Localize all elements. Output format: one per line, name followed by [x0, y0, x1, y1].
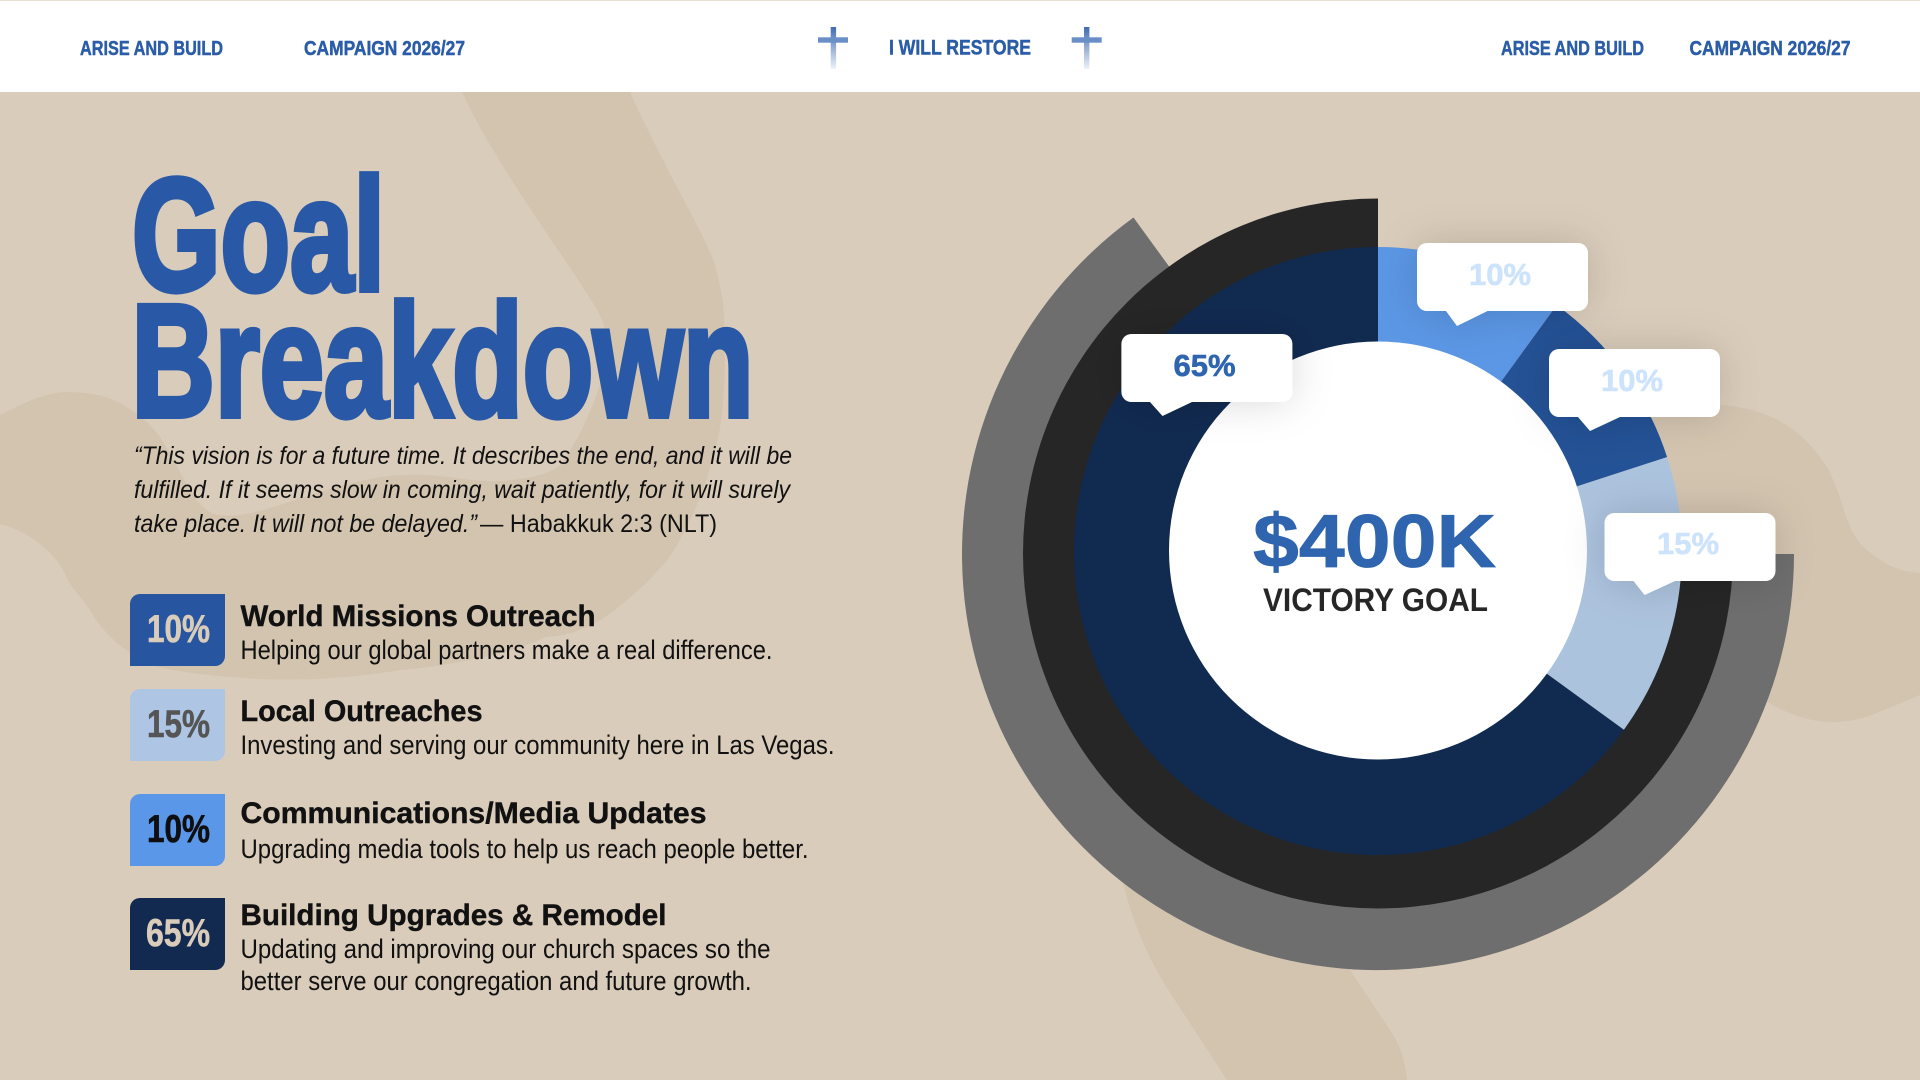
item heading: World Missions Outreach [240, 600, 596, 633]
title [132, 145, 754, 450]
header text: left arise and build: ARISE AND BUILD [80, 37, 223, 60]
item description: Upgrading media tools to help us reach people better. [240, 834, 808, 864]
callout: 10 percent top [1417, 243, 1588, 326]
callout: 65 percent [1121, 334, 1292, 416]
header text: right campaign: CAMPAIGN 2026/27 [1690, 37, 1850, 60]
quote text: “This vision is for a future time. It describes the end, and it will be [134, 442, 792, 470]
segment 10 percent missions [1378, 305, 1667, 551]
header text: i will restore: I WILL RESTORE [889, 36, 1031, 60]
quote text [134, 442, 792, 538]
callout: 10 percent right [1549, 349, 1720, 431]
item heading: Local Outreaches [240, 695, 482, 728]
background swoosh: left [0, 92, 725, 680]
item description: better serve our congregation and future growth. [240, 966, 752, 996]
item description: Helping our global partners make a real difference. [240, 635, 772, 665]
header bar [0, 0, 1920, 92]
legend: local outreaches [130, 689, 834, 761]
legend: communications and media updates [130, 794, 808, 866]
outer gray ring [962, 218, 1794, 970]
center amount: $400K [1253, 499, 1496, 583]
callout: 15 percent [1604, 513, 1776, 595]
badge 15 percent: 15% [147, 703, 210, 746]
segment 10 percent communications [1378, 247, 1557, 551]
badge 65 percent: 65% [146, 912, 210, 955]
item heading: Communications/Media Updates [240, 797, 706, 830]
item description: Updating and improving our church spaces so the [240, 934, 770, 964]
item heading: Building Upgrades & Remodel [240, 899, 666, 932]
header text: right arise and build: ARISE AND BUILD [1501, 37, 1644, 60]
background swoosh: right [1123, 400, 1920, 1080]
header text: left campaign: CAMPAIGN 2026/27 [304, 37, 465, 60]
icon: left cross [818, 27, 848, 69]
badge 15 percent [130, 689, 225, 761]
center circle [1169, 342, 1587, 760]
quote text: take place. It will not be delayed.” [134, 510, 479, 538]
black ring [1023, 198, 1733, 908]
legend: world missions outreach [130, 594, 772, 666]
callout: 15 percent: 15% [1657, 526, 1719, 561]
icon: right cross [1072, 27, 1102, 69]
badge 65 percent [130, 898, 225, 970]
quote text: fulfilled. If it seems slow in coming, wait patiently, for it will surely [134, 476, 791, 504]
segment 65 percent building [1074, 247, 1624, 855]
item description: Investing and serving our community here in Las Vegas. [240, 730, 834, 760]
badge 10 percent: 10% [147, 608, 210, 651]
badge 10 percent: 10% [147, 808, 210, 851]
title: Goal [132, 145, 385, 324]
callout: 10 percent top: 10% [1469, 257, 1531, 292]
callout: 10 percent right: 10% [1601, 363, 1663, 398]
center label: VICTORY GOAL [1263, 582, 1488, 618]
donut chart [962, 198, 1794, 970]
quote text: — Habakkuk 2:3 (NLT) [480, 510, 717, 538]
segment 15 percent local [1378, 457, 1682, 730]
item description [240, 934, 770, 996]
legend: building upgrades and remodel [130, 898, 770, 996]
title: Breakdown [132, 271, 754, 450]
callout: 65 percent: 65% [1173, 348, 1236, 383]
badge 10 percent [130, 794, 225, 866]
badge 10 percent [130, 594, 225, 666]
